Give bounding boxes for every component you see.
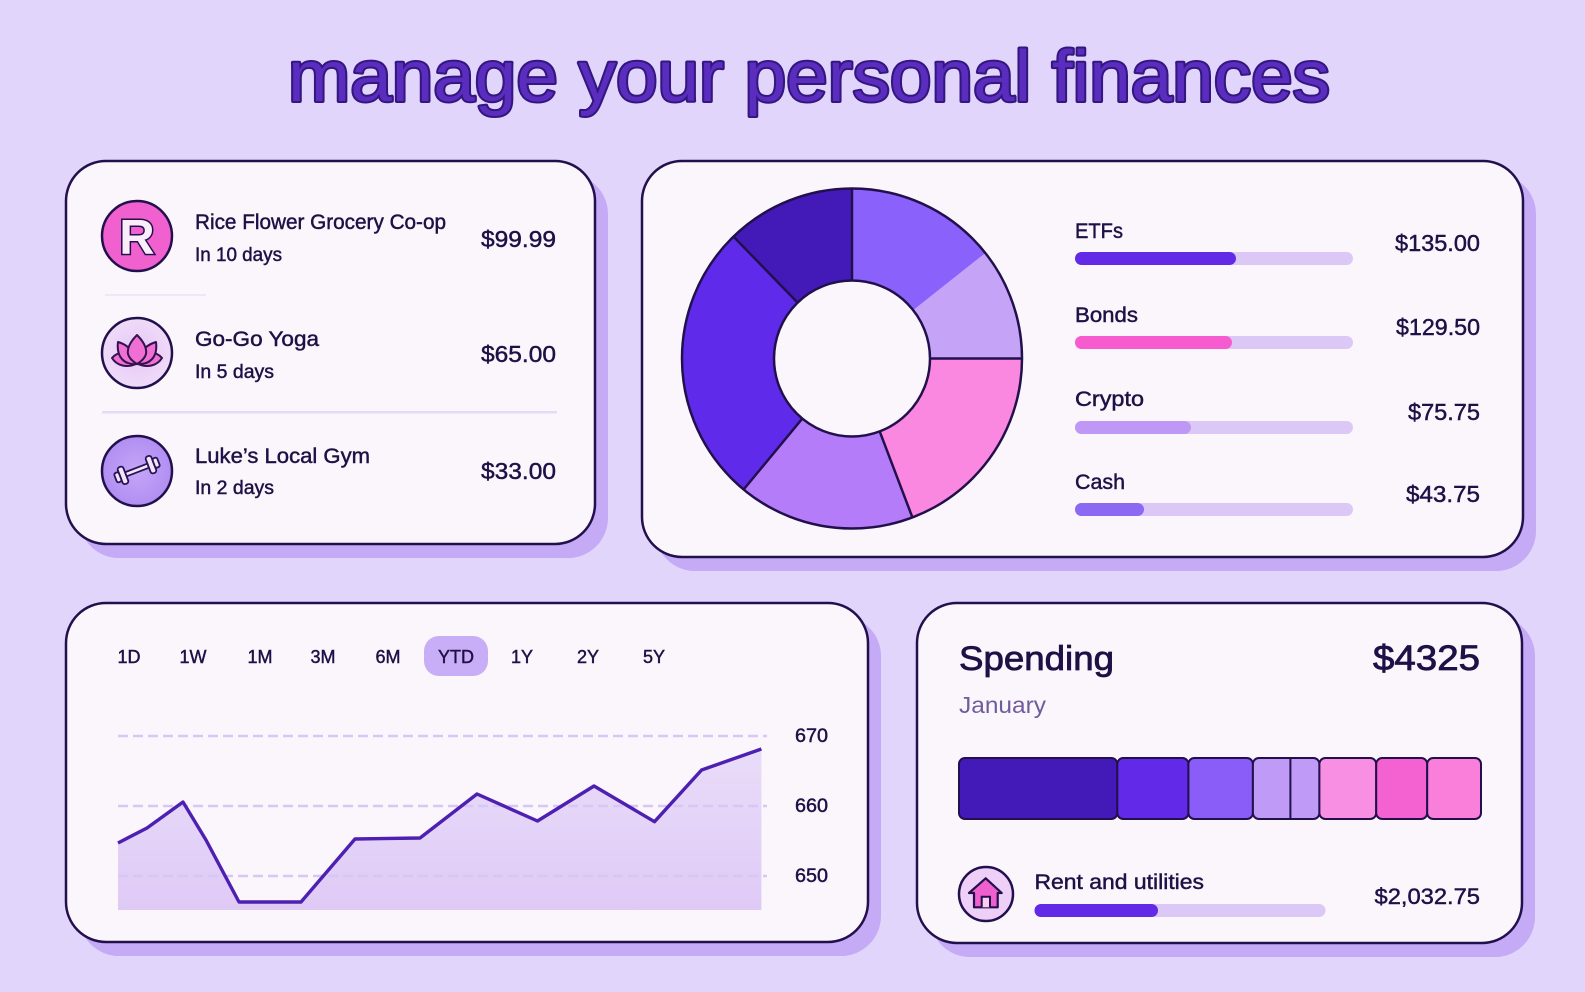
bill row: Rice Flower Grocery Co-op: Rice Flower Grocery Co-op [195, 211, 446, 234]
icon: R logo: R [119, 211, 155, 265]
time range tabs: 1Y [511, 647, 533, 667]
bill row: Rice Flower Grocery Co-op [102, 201, 556, 271]
legend row: Bonds: Bonds [1075, 304, 1138, 327]
icon: R logo [102, 201, 172, 271]
stacked spending bar [959, 758, 1481, 819]
time range tabs: 2Y [577, 647, 599, 667]
icon: house [959, 867, 1013, 921]
donut chart [682, 188, 1022, 529]
bill row: Go-Go Yoga [102, 318, 556, 388]
bill row: Rice Flower Grocery Co-op: $99.99 [481, 226, 556, 252]
panel: portfolio allocation [642, 161, 1536, 571]
heading: Spending: Spending [959, 640, 1114, 678]
spending row: rent and utilities: $2,032.75 [1374, 884, 1480, 909]
line chart: 670 [795, 726, 828, 747]
bill row: Go-Go Yoga: $65.00 [481, 341, 556, 367]
legend row: Crypto [1075, 388, 1480, 434]
bill row: Go-Go Yoga: Go-Go Yoga [195, 328, 319, 351]
panel: price history [66, 603, 881, 956]
time range tabs: 6M [375, 647, 401, 667]
month label: January [959, 692, 1047, 718]
panel: upcoming bills [66, 161, 608, 558]
legend row: ETFs: ETFs [1075, 220, 1123, 243]
bill row: Luke's Local Gym [102, 436, 556, 506]
line chart [118, 726, 828, 910]
legend row: ETFs [1075, 220, 1480, 265]
time range tabs: 1M [247, 647, 273, 667]
legend row: Bonds [1075, 304, 1480, 349]
legend row: Cash: Cash [1075, 471, 1125, 494]
legend row: Cash: $43.75 [1406, 481, 1480, 507]
icon: dumbbell [102, 436, 172, 506]
legend row: Crypto: Crypto [1075, 388, 1144, 411]
bill row: Luke's Local Gym: Luke’s Local Gym [195, 445, 370, 468]
title: manage your personal finances [288, 37, 1330, 117]
bill row: Go-Go Yoga: In 5 days [195, 362, 274, 383]
spending row: rent and utilities: Rent and utilities [1034, 871, 1204, 894]
time range tabs: YTD [438, 647, 474, 667]
legend row: ETFs: $135.00 [1395, 230, 1480, 256]
time range tabs: 5Y [643, 647, 665, 667]
legend row: Crypto: $75.75 [1408, 399, 1480, 425]
line chart: 650 [795, 866, 828, 887]
icon: lotus [102, 318, 172, 388]
legend row: Cash [1075, 471, 1480, 516]
bill row: Luke's Local Gym: $33.00 [481, 458, 556, 484]
bill row: Luke's Local Gym: In 2 days [195, 478, 274, 499]
time range tabs [117, 636, 665, 676]
panel: spending [917, 603, 1535, 957]
time range tabs: 3M [310, 647, 336, 667]
total amount: $4325 [1373, 639, 1480, 678]
legend row: Bonds: $129.50 [1396, 314, 1480, 340]
bill row: Rice Flower Grocery Co-op: In 10 days [195, 245, 282, 266]
time range tabs: 1W [180, 647, 207, 667]
line chart: 660 [795, 796, 828, 817]
time range tabs: 1D [117, 647, 141, 667]
spending row: rent and utilities [959, 867, 1480, 921]
